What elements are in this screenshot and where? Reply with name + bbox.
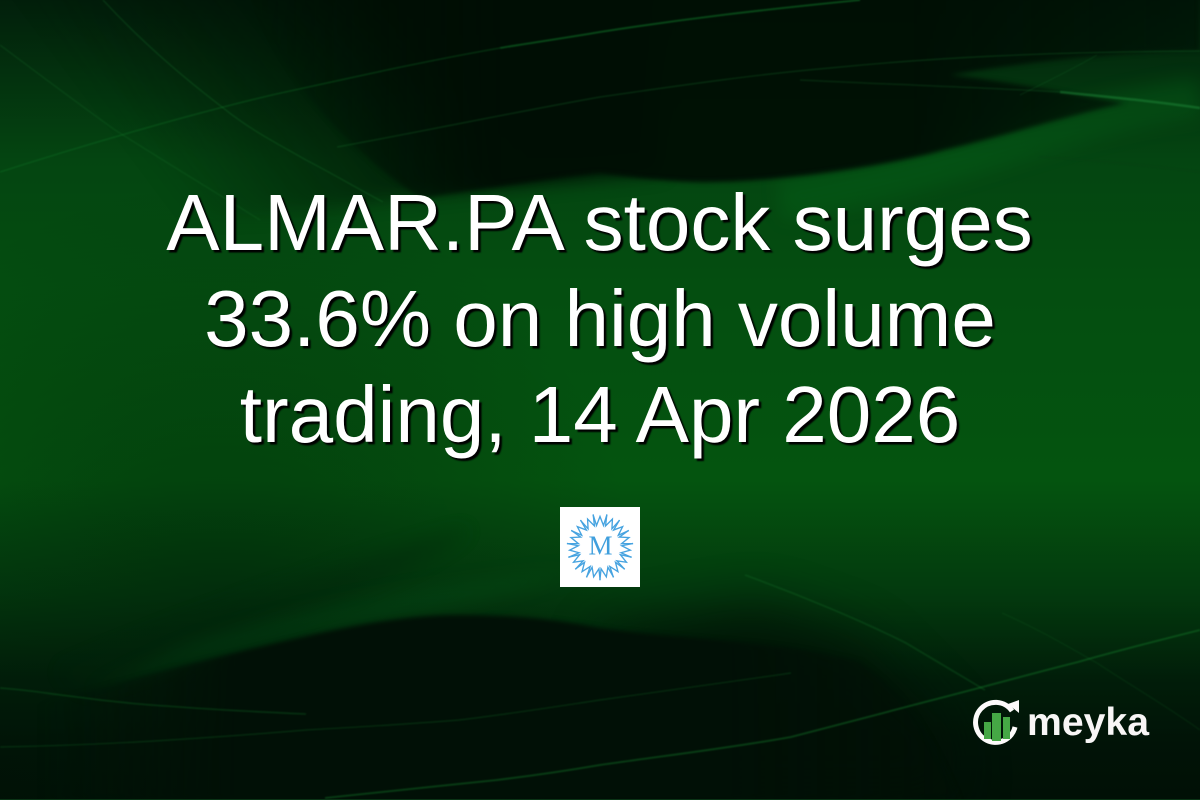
- icon: company logo: M: [588, 530, 613, 560]
- title: 33.6% on high volume: [204, 274, 996, 363]
- logo: meyka brand: [973, 700, 1150, 745]
- title: ALMAR.PA stock surges: [166, 178, 1033, 267]
- icon: circular arrow with bars: [976, 700, 1019, 742]
- title: trading, 14 Apr 2026: [240, 370, 960, 459]
- icon: company logo: [560, 507, 640, 587]
- title: [166, 178, 1033, 462]
- wordmark: meyka: [1027, 701, 1149, 744]
